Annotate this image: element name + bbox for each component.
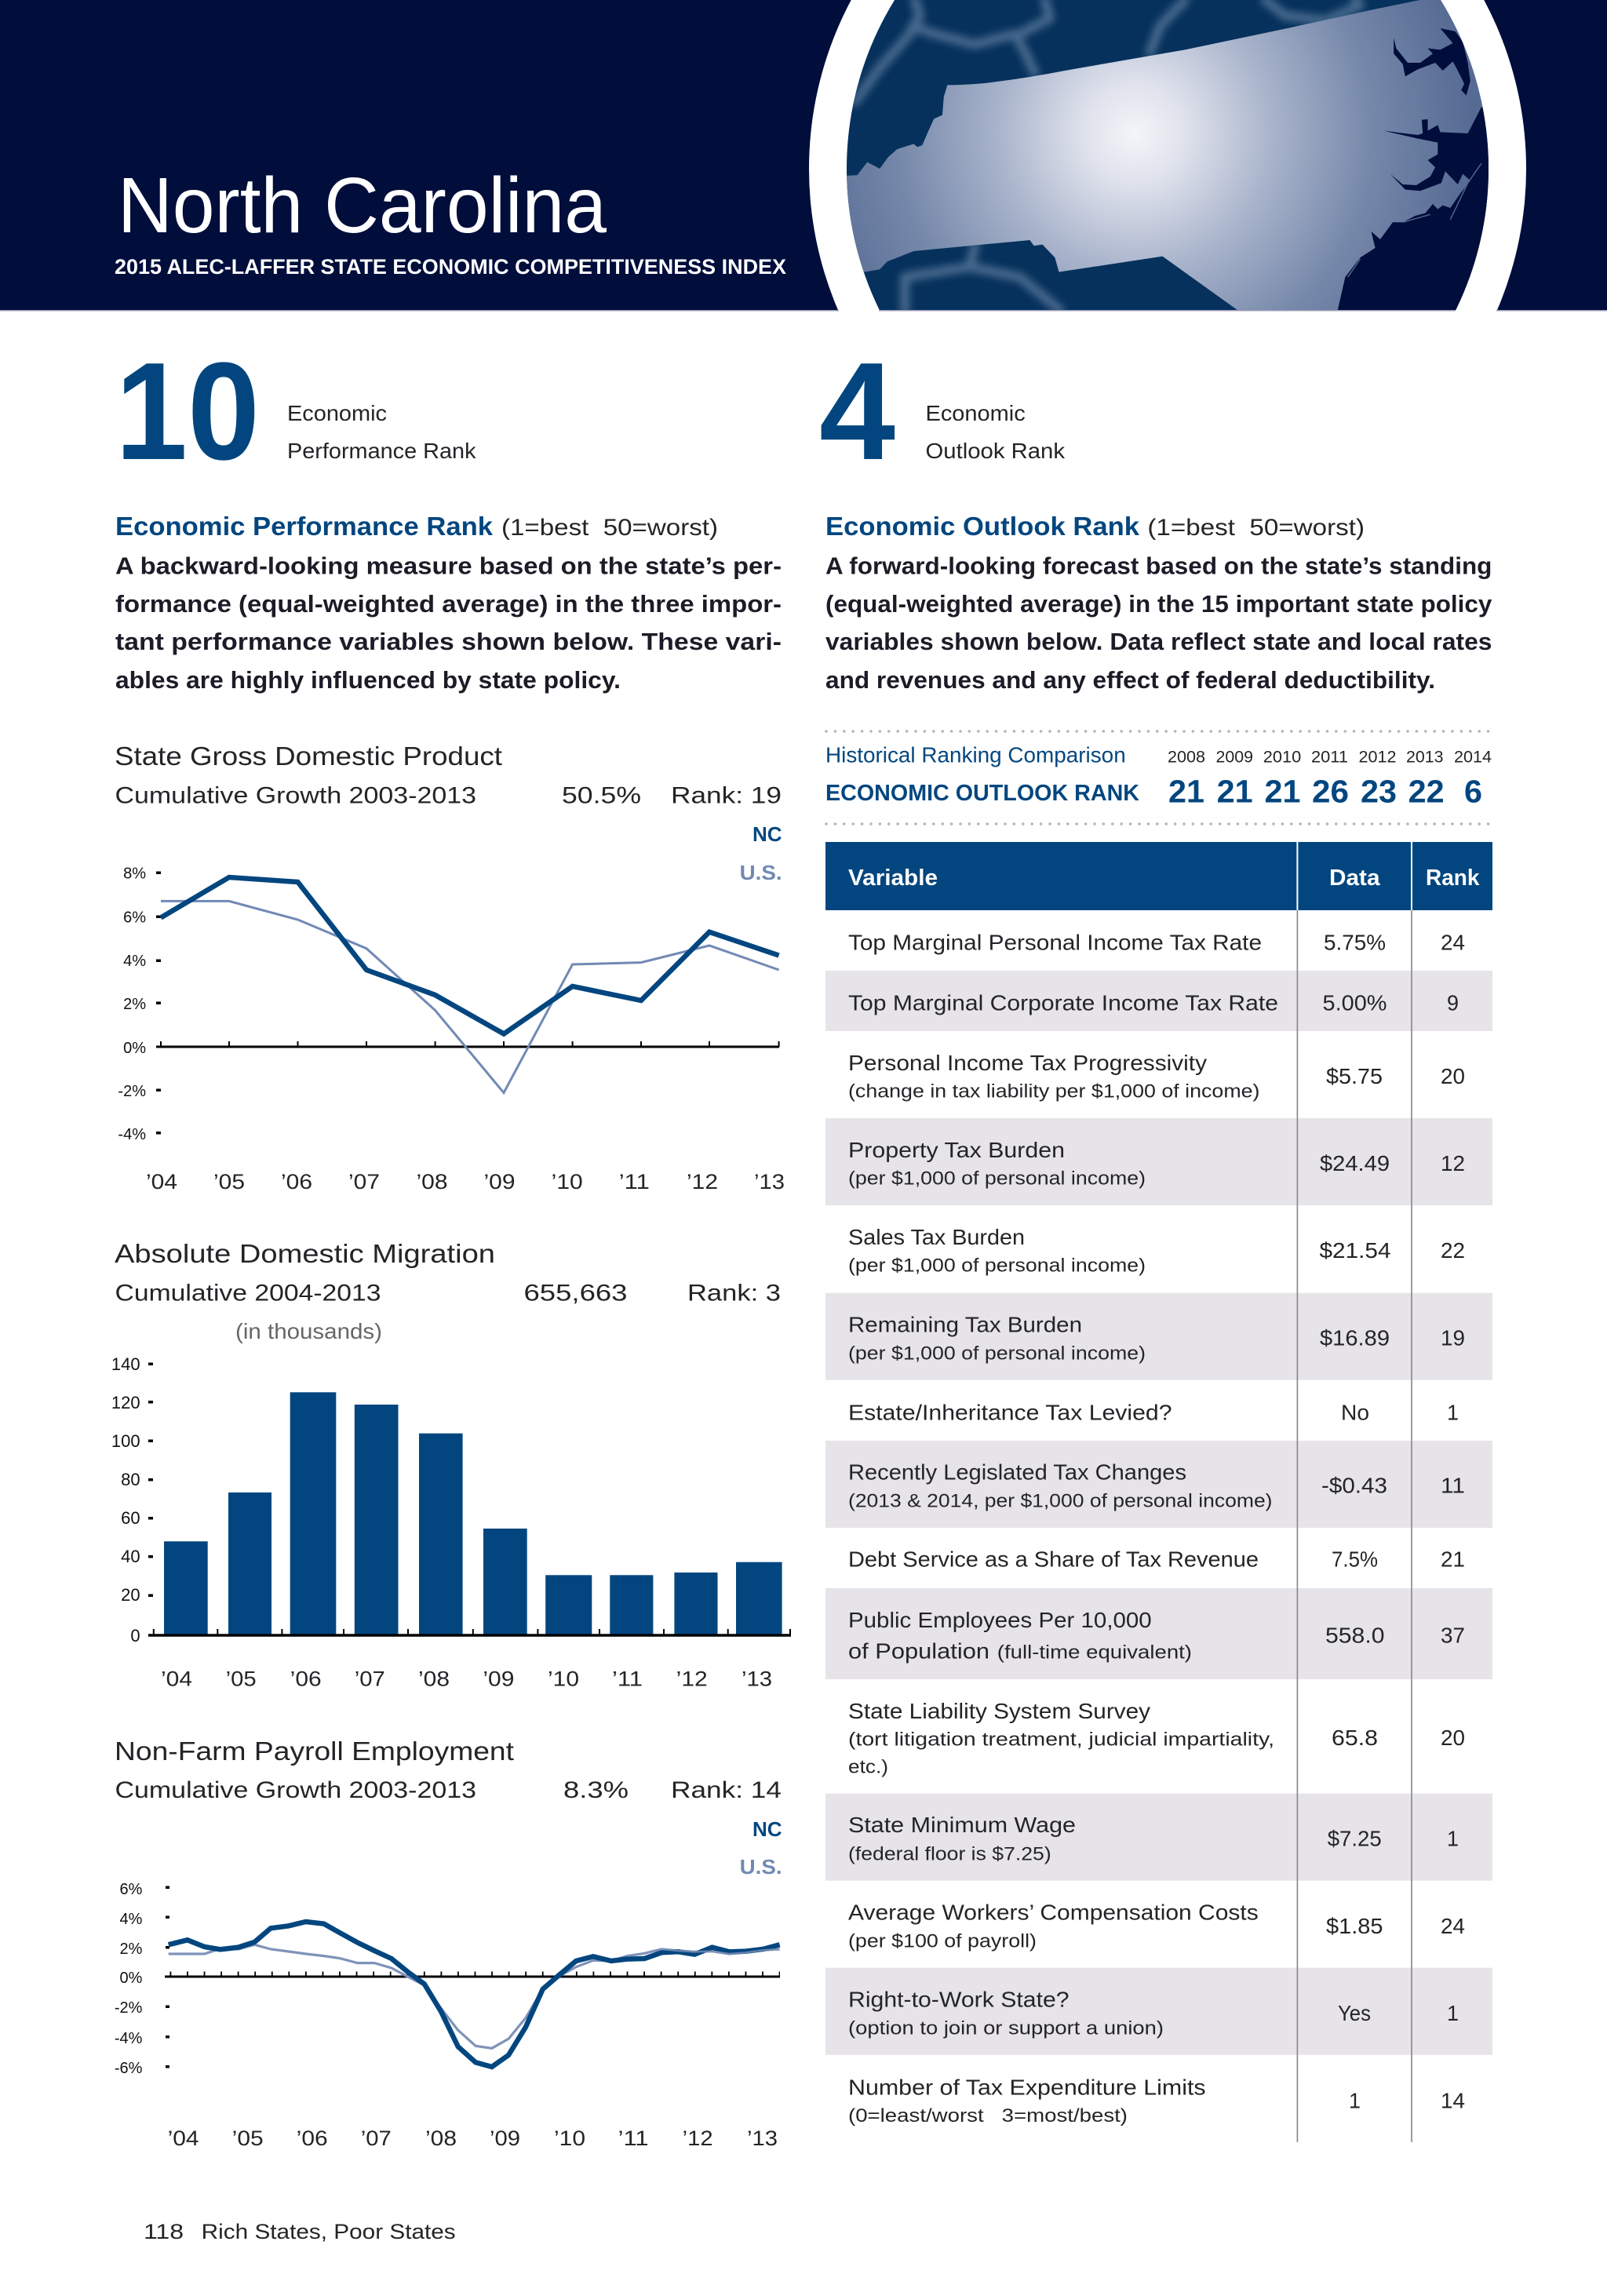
line: NC [169, 1922, 780, 2067]
row: number of tax expenditure limits: 1 [1349, 2089, 1361, 2113]
row: remaining tax burden: (per $1,000 of personal income) [848, 1343, 1146, 1364]
outlook rank label: ECONOMIC OUTLOOK RANK [825, 781, 1139, 806]
chart heading: (in thousands) [235, 1319, 382, 1343]
description: ables are highly influenced by state policy. [115, 666, 621, 694]
rank label: Economic [287, 401, 387, 425]
x-axis year labels: ’05 [213, 1170, 245, 1194]
x-axis year labels: ’10 [552, 1170, 583, 1194]
description: formance (equal-weighted average) in the three impor- [115, 590, 782, 618]
x-axis year labels: ’09 [490, 2127, 520, 2150]
row: state liability system survey: 65.8 [1332, 1726, 1378, 1750]
row: debt service: Debt Service as a Share of Tax Revenue [848, 1547, 1259, 1572]
heading [115, 512, 718, 541]
x-axis year labels: ’07 [355, 1667, 385, 1690]
row: state liability system survey: (tort litigation treatment, judicial impartiality, [848, 1729, 1274, 1751]
heading: Economic Outlook Rank [825, 512, 1140, 541]
bar chart: domestic migration: 120 [111, 1393, 140, 1412]
line chart: payroll employment: -6% [115, 2060, 143, 2077]
row: number of tax expenditure limits [848, 2075, 1465, 2127]
line chart: payroll employment: -2% [115, 1999, 143, 2017]
x-axis year labels: ’12 [683, 2127, 713, 2150]
line chart: GDP growth: 0% [123, 1040, 146, 1057]
line chart: payroll employment [115, 1881, 780, 2150]
row: recently legislated tax changes: 11 [1441, 1474, 1465, 1498]
row: remaining tax burden: Remaining Tax Burden [848, 1313, 1082, 1337]
row: number of tax expenditure limits: 14 [1441, 2089, 1465, 2113]
chart heading: Rank: 3 [687, 1280, 781, 1306]
title: North Carolina [118, 162, 607, 250]
row: average workers compensation costs [848, 1901, 1465, 1952]
row: right-to-work state: Right-to-Work State? [848, 1988, 1070, 2012]
bar chart: domestic migration: 20 [121, 1585, 140, 1605]
row: property tax burden: Property Tax Burden [848, 1138, 1065, 1162]
chart heading [115, 1240, 781, 1343]
rank number 10: 10 [115, 333, 260, 489]
description: A backward-looking measure based on the state’s per- [115, 552, 782, 579]
table header: Variable [848, 866, 938, 891]
rank label: Outlook Rank [926, 439, 1066, 463]
row: top marginal personal income tax rate [848, 931, 1465, 955]
x-axis year labels: ’06 [290, 1667, 322, 1690]
x-axis year labels: ’11 [612, 1667, 643, 1690]
legend: U.S. [740, 1855, 782, 1879]
row: property tax burden: (per $1,000 of personal income) [848, 1168, 1146, 1190]
row: right-to-work state [848, 1988, 1459, 2039]
line chart: GDP growth: -4% [118, 1126, 146, 1143]
chart heading: Absolute Domestic Migration [115, 1240, 495, 1269]
icon: North Carolina state map in circle [809, 0, 1526, 310]
x-axis year labels: ’04 [168, 2127, 199, 2150]
panel: economic outlook rank [819, 333, 1492, 694]
row: estate/inheritance tax levied: No [1341, 1400, 1369, 1424]
x-axis year labels: ’06 [297, 2127, 328, 2150]
x-axis year labels: ’11 [619, 1170, 650, 1194]
year labels: 2010 [1263, 749, 1301, 767]
rank label: Performance Rank [287, 439, 477, 463]
row: state liability system survey: State Liability System Survey [848, 1699, 1150, 1723]
row: state liability system survey: etc.) [848, 1756, 888, 1777]
chart heading: Cumulative 2004-2013 [115, 1280, 381, 1306]
historical rank values: 6 [1464, 774, 1482, 810]
line chart: payroll employment: 6% [119, 1881, 143, 1898]
row: public employees: of Population [848, 1638, 989, 1663]
row: remaining tax burden [848, 1313, 1465, 1364]
description: tant performance variables shown below. These vari- [115, 628, 782, 655]
table header: Rank [1426, 866, 1480, 891]
line: NC [161, 877, 779, 1034]
panel: non-farm payroll employment [115, 1737, 782, 2150]
historical rank values [1168, 774, 1482, 810]
row: personal income tax progressivity: (change in tax liability per $1,000 of income) [848, 1081, 1260, 1102]
row: remaining tax burden: 19 [1441, 1326, 1465, 1350]
line chart: payroll employment: 0% [119, 1970, 143, 1987]
row: property tax burden [848, 1138, 1465, 1190]
bar chart: domestic migration: 0 [130, 1626, 140, 1645]
line chart: GDP growth: 4% [123, 953, 146, 970]
line chart: payroll employment: 2% [119, 1941, 143, 1958]
row: state minimum wage: 1 [1447, 1827, 1459, 1851]
row: public employees: (full-time equivalent) [997, 1642, 1192, 1663]
chart heading: Non-Farm Payroll Employment [115, 1737, 515, 1766]
row: recently legislated tax changes: (2013 & 2014, per $1,000 of personal income) [848, 1491, 1273, 1512]
row: sales tax burden [848, 1225, 1465, 1277]
x-axis year labels: ’08 [416, 1170, 447, 1194]
row: property tax burden: 12 [1441, 1151, 1465, 1175]
heading [825, 512, 1365, 541]
row: public employees [848, 1608, 1465, 1663]
line: U.S. [169, 1944, 780, 2048]
x-axis year labels: ’10 [554, 2127, 585, 2150]
description [115, 552, 782, 694]
chart heading: Rank: 14 [671, 1777, 782, 1803]
legend: NC [752, 1817, 782, 1841]
year labels: 2011 [1311, 749, 1348, 767]
row: top marginal personal income tax rate: 5.75% [1324, 931, 1386, 955]
header banner [0, 0, 1607, 311]
x-axis year labels [146, 1170, 785, 1194]
row: debt service: 21 [1441, 1547, 1465, 1572]
historical rank values: 21 [1217, 774, 1253, 810]
line chart: payroll employment: -4% [115, 2030, 143, 2047]
historical rank values: 23 [1361, 774, 1397, 810]
row: number of tax expenditure limits: (0=least/worst 3=most/best) [848, 2105, 1128, 2127]
rank number 4: 4 [819, 333, 895, 489]
row: estate/inheritance tax levied: 1 [1447, 1400, 1459, 1424]
row: debt service [848, 1547, 1465, 1572]
line chart: GDP growth: 6% [123, 909, 146, 926]
table header: Data [1329, 866, 1381, 891]
year labels: 2008 [1168, 749, 1205, 767]
row: recently legislated tax changes: -$0.43 [1321, 1474, 1387, 1498]
line chart: GDP growth: 8% [123, 865, 146, 882]
x-axis year labels: ’13 [754, 1170, 785, 1194]
panel: economic performance rank [115, 333, 782, 694]
x-axis year labels: ’07 [361, 2127, 392, 2150]
panel: historical ranking comparison [825, 731, 1492, 824]
chart heading: 50.5% [562, 782, 641, 808]
row: sales tax burden: 22 [1441, 1238, 1465, 1263]
chart heading [115, 1737, 782, 1803]
x-axis year labels: ’05 [226, 1667, 257, 1690]
row: recently legislated tax changes: Recently Legislated Tax Changes [848, 1460, 1186, 1485]
heading: (1=best 50=worst) [1147, 515, 1365, 541]
row: sales tax burden: $21.54 [1320, 1238, 1390, 1263]
heading: (1=best 50=worst) [501, 515, 718, 541]
x-axis year labels: ’09 [483, 1667, 514, 1690]
row: public employees: Public Employees Per 10,000 [848, 1608, 1152, 1632]
rank label [287, 401, 477, 463]
historical rank values: 21 [1265, 774, 1301, 810]
description: A forward-looking forecast based on the state’s standing [825, 552, 1492, 579]
bar chart: domestic migration [111, 1354, 791, 1690]
panel: variables table [825, 842, 1492, 2142]
chart heading: Rank: 19 [671, 782, 782, 808]
chart heading: 655,663 [524, 1280, 628, 1306]
x-axis year labels: ’13 [747, 2127, 778, 2150]
description: and revenues and any effect of federal deductibility. [825, 666, 1435, 694]
x-axis year labels: ’09 [483, 1170, 515, 1194]
comparison heading: Historical Ranking Comparison [825, 743, 1126, 767]
row: number of tax expenditure limits: Number of Tax Expenditure Limits [848, 2075, 1206, 2099]
row: top marginal personal income tax rate: 24 [1441, 931, 1465, 955]
subtitle: 2015 ALEC-LAFFER STATE ECONOMIC COMPETITIVENESS INDEX [115, 255, 786, 279]
row: average workers compensation costs: $1.85 [1326, 1914, 1383, 1938]
page footer: Rich States, Poor States [202, 2220, 456, 2243]
row: personal income tax progressivity [848, 1051, 1465, 1102]
year labels: 2009 [1216, 749, 1253, 767]
year labels [1168, 749, 1492, 767]
row: state liability system survey: 20 [1441, 1726, 1465, 1750]
table row shading [825, 971, 1492, 2055]
x-axis year labels [161, 1667, 772, 1690]
row: estate/inheritance tax levied: Estate/Inheritance Tax Levied? [848, 1400, 1172, 1424]
row: right-to-work state: (option to join or support a union) [848, 2018, 1164, 2039]
row: top marginal corporate income tax rate: Top Marginal Corporate Income Tax Rate [848, 991, 1278, 1015]
panel: state gross domestic product [115, 742, 785, 1194]
x-axis year labels: ’08 [418, 1667, 450, 1690]
row: estate/inheritance tax levied [848, 1400, 1459, 1424]
x-axis year labels: ’13 [742, 1667, 772, 1690]
legend [740, 1817, 782, 1879]
description: (equal-weighted average) in the 15 important state policy [825, 590, 1492, 618]
x-axis year labels: ’10 [548, 1667, 579, 1690]
row: personal income tax progressivity: $5.75 [1326, 1064, 1383, 1088]
x-axis year labels: ’08 [425, 2127, 457, 2150]
row: state minimum wage [848, 1813, 1459, 1865]
row: state minimum wage: $7.25 [1328, 1827, 1382, 1851]
bar chart: domestic migration: 80 [121, 1470, 140, 1489]
x-axis year labels: ’07 [348, 1170, 380, 1194]
chart heading: Cumulative Growth 2003-2013 [115, 782, 476, 808]
line chart: GDP growth: 2% [123, 996, 146, 1013]
year labels: 2014 [1454, 749, 1492, 767]
x-axis year labels: ’11 [618, 2127, 649, 2150]
panel: absolute domestic migration [111, 1240, 791, 1690]
row: average workers compensation costs: (per $100 of payroll) [848, 1931, 1037, 1952]
chart heading [115, 742, 782, 808]
bar chart: domestic migration: 60 [121, 1508, 140, 1528]
x-axis year labels [168, 2127, 778, 2150]
row: personal income tax progressivity: 20 [1441, 1064, 1465, 1088]
row: average workers compensation costs: 24 [1441, 1914, 1465, 1938]
chart heading: Cumulative Growth 2003-2013 [115, 1777, 476, 1803]
row: top marginal personal income tax rate: Top Marginal Personal Income Tax Rate [848, 931, 1262, 955]
row: state minimum wage: State Minimum Wage [848, 1813, 1076, 1837]
row: public employees: 558.0 [1325, 1623, 1384, 1647]
x-axis year labels: ’04 [161, 1667, 192, 1690]
legend: U.S. [740, 861, 782, 884]
chart heading: State Gross Domestic Product [115, 742, 503, 771]
page footer: 118 [144, 2220, 184, 2243]
row: sales tax burden: Sales Tax Burden [848, 1225, 1025, 1249]
row: personal income tax progressivity: Personal Income Tax Progressivity [848, 1051, 1207, 1075]
row: state minimum wage: (federal floor is $7.25) [848, 1844, 1051, 1865]
x-axis year labels: ’12 [687, 1170, 718, 1194]
bar chart: domestic migration: 100 [111, 1431, 140, 1451]
chart heading: 8.3% [563, 1777, 629, 1803]
historical rank values: 21 [1168, 774, 1204, 810]
historical rank values: 22 [1408, 774, 1445, 810]
row: top marginal corporate income tax rate [848, 991, 1459, 1015]
x-axis year labels: ’12 [676, 1667, 708, 1690]
x-axis year labels: ’06 [281, 1170, 312, 1194]
row: sales tax burden: (per $1,000 of personal income) [848, 1256, 1146, 1277]
rank label: Economic [926, 401, 1026, 425]
year labels: 2012 [1359, 749, 1397, 767]
row: average workers compensation costs: Average Workers’ Compensation Costs [848, 1901, 1259, 1925]
row: remaining tax burden: $16.89 [1320, 1326, 1390, 1350]
line chart: GDP growth: -2% [118, 1083, 146, 1100]
description: variables shown below. Data reflect state and local rates [825, 628, 1492, 655]
bar chart: domestic migration: 40 [121, 1547, 140, 1566]
row: property tax burden: $24.49 [1320, 1151, 1390, 1175]
row: top marginal corporate income tax rate: 5.00% [1323, 991, 1387, 1015]
table header [825, 842, 1492, 910]
line chart: payroll employment: 4% [119, 1911, 143, 1928]
line: U.S. [161, 901, 779, 1093]
legend [740, 822, 782, 884]
row: debt service: 7.5% [1332, 1547, 1378, 1572]
historical rank values: 26 [1312, 774, 1349, 810]
row: top marginal corporate income tax rate: 9 [1447, 991, 1459, 1015]
row: right-to-work state: 1 [1447, 2001, 1459, 2025]
rank label [926, 401, 1066, 463]
bar chart: domestic migration: 140 [111, 1354, 140, 1374]
row: recently legislated tax changes [848, 1460, 1465, 1512]
heading: Economic Performance Rank [115, 512, 494, 541]
line chart: GDP growth [118, 865, 785, 1194]
description [825, 552, 1492, 694]
x-axis year labels: ’05 [232, 2127, 264, 2150]
year labels: 2013 [1406, 749, 1444, 767]
row: state liability system survey [848, 1699, 1465, 1777]
row: public employees: 37 [1441, 1623, 1465, 1647]
x-axis year labels: ’04 [146, 1170, 177, 1194]
row: right-to-work state: Yes [1338, 2001, 1371, 2025]
legend: NC [752, 822, 782, 846]
